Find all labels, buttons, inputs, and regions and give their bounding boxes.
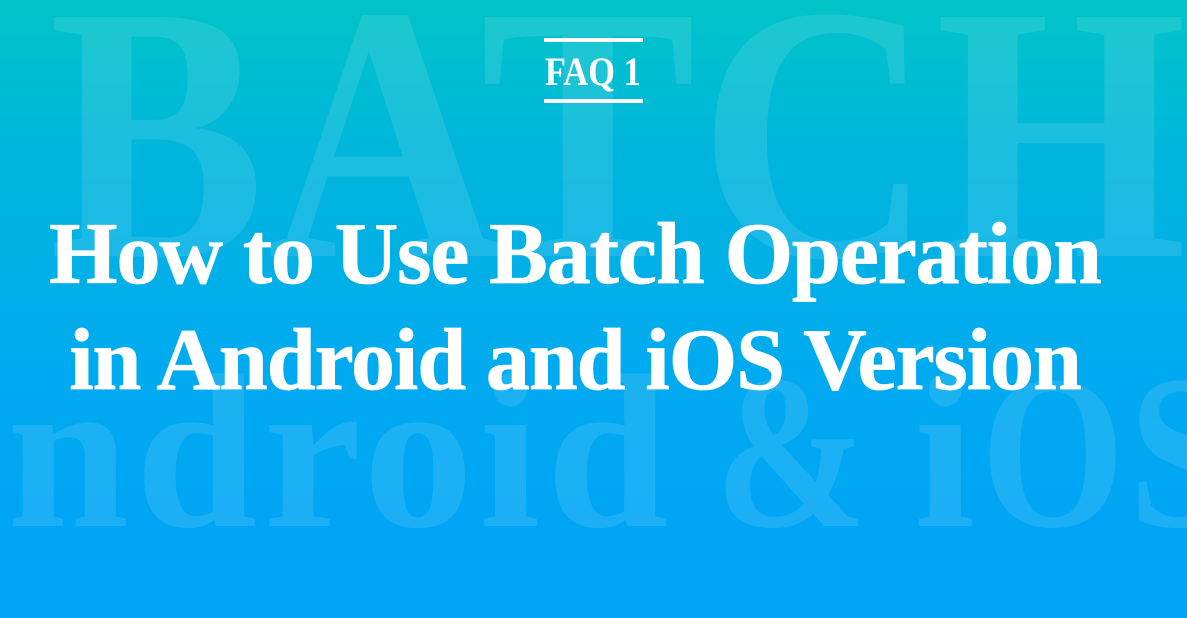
badge label: FAQ 1 (545, 49, 641, 94)
background word: Android & iOS (0, 342, 1187, 574)
title line 2: in Android and iOS Version (69, 312, 1081, 409)
badge: FAQ 1 (544, 38, 643, 103)
title line 1: How to Use Batch Operation (49, 206, 1101, 303)
